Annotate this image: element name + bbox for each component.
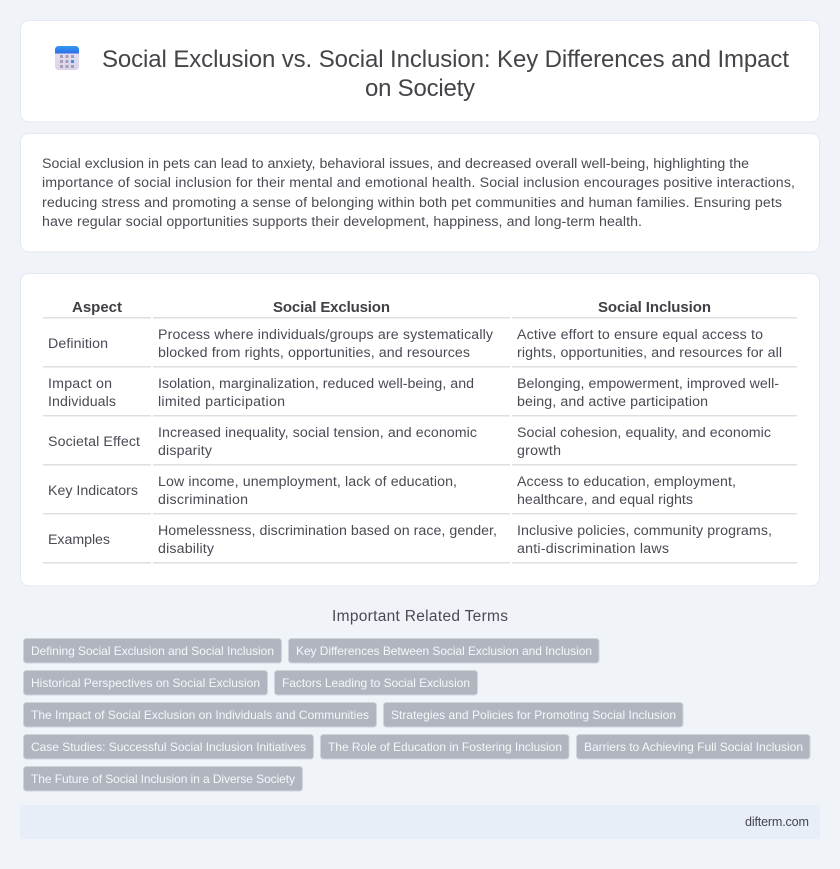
panel: header xyxy=(20,20,820,122)
row: definition: Active effort to ensure equal access to xyxy=(517,327,763,343)
heading: important related terms: Important Related Terms xyxy=(332,608,508,625)
tag xyxy=(24,734,314,759)
row: definition: blocked from rights, opportunities, and resources xyxy=(158,345,470,361)
intro paragraph: Social exclusion in pets can lead to anxiety, behavioral issues, and decreased overall well-being, highlighting the xyxy=(42,156,749,172)
row: impact on individuals: being, and active participation xyxy=(517,394,708,410)
table header: Aspect xyxy=(72,299,122,316)
row: key indicators: Low income, unemployment, lack of education, xyxy=(158,474,457,490)
row: societal effect: Social cohesion, equality, and economic xyxy=(517,425,771,441)
row: societal effect: disparity xyxy=(158,443,213,459)
tag: Defining Social Exclusion and Social Inclusion xyxy=(31,644,274,658)
row: impact on individuals: limited participation xyxy=(158,394,285,410)
row: definition: Process where individuals/groups are systematically xyxy=(158,327,494,343)
footer bar xyxy=(20,805,820,839)
row: societal effect: growth xyxy=(517,443,561,459)
row: examples: disability xyxy=(158,541,215,557)
tag: Factors Leading to Social Exclusion xyxy=(282,676,470,690)
row: societal effect: Increased inequality, social tension, and economic xyxy=(158,425,477,441)
intro paragraph xyxy=(42,156,795,230)
row: definition: rights, opportunities, and resources for all xyxy=(517,345,782,361)
icon: calendar xyxy=(55,46,79,70)
row: impact on individuals: Belonging, empowerment, improved well- xyxy=(517,376,779,392)
intro paragraph: reducing stress and promoting a sense of belonging within both pet communities and human families. Ensuring pets xyxy=(42,195,782,211)
row: key indicators: healthcare, and equal rights xyxy=(517,492,693,508)
row: examples: Homelessness, discrimination based on race, gender, xyxy=(158,523,497,539)
tag xyxy=(320,734,569,759)
tag: The Role of Education in Fostering Inclusion xyxy=(328,740,562,754)
tag: Barriers to Achieving Full Social Inclusion xyxy=(584,740,803,754)
row: examples: Inclusive policies, community programs, xyxy=(517,523,772,539)
tag: Strategies and Policies for Promoting Social Inclusion xyxy=(391,708,676,722)
tag: The Impact of Social Exclusion on Individuals and Communities xyxy=(31,708,369,722)
tag xyxy=(274,670,478,695)
tag xyxy=(288,638,599,663)
row: societal effect: Societal Effect xyxy=(48,434,140,450)
row: examples xyxy=(48,523,772,557)
title: Social Exclusion vs. Social Inclusion: Key Differences and Impact xyxy=(102,46,789,73)
row: key indicators: Key Indicators xyxy=(48,483,138,499)
table header: Social Inclusion xyxy=(598,299,711,316)
footer site name: difterm.com xyxy=(745,815,809,829)
row: key indicators: Access to education, employment, xyxy=(517,474,736,490)
title: on Society xyxy=(365,75,475,102)
row: definition: Definition xyxy=(48,336,108,352)
intro paragraph: importance of social inclusion for their mental and emotional health. Social inclusion encourages positive interactions, xyxy=(42,175,795,191)
tag xyxy=(24,638,282,663)
tag: The Future of Social Inclusion in a Diverse Society xyxy=(31,772,295,786)
row: key indicators: discrimination xyxy=(158,492,248,508)
row: examples: anti-discrimination laws xyxy=(517,541,669,557)
intro paragraph: have regular social opportunities supports their development, happiness, and long-term health. xyxy=(42,214,642,230)
row: societal effect xyxy=(48,425,771,459)
title xyxy=(102,46,789,102)
row: definition xyxy=(48,327,782,361)
tag xyxy=(24,670,268,695)
row: key indicators xyxy=(48,474,736,508)
row: impact on individuals xyxy=(48,376,779,410)
tag: Historical Perspectives on Social Exclusion xyxy=(31,676,260,690)
tag: Case Studies: Successful Social Inclusion Initiatives xyxy=(31,740,306,754)
table header: Social Exclusion xyxy=(273,299,390,316)
tag xyxy=(24,702,376,727)
tag: Key Differences Between Social Exclusion and Inclusion xyxy=(296,644,592,658)
panel: introduction xyxy=(20,134,820,252)
panel: comparison table xyxy=(20,274,820,586)
table header xyxy=(72,299,711,316)
row: impact on individuals: Individuals xyxy=(48,394,116,410)
row: impact on individuals: Impact on xyxy=(48,376,112,392)
row: examples: Examples xyxy=(48,532,110,548)
related term tags xyxy=(24,638,810,791)
tag xyxy=(384,702,683,727)
tag xyxy=(24,766,302,791)
row: impact on individuals: Isolation, marginalization, reduced well-being, and xyxy=(158,376,474,392)
tag xyxy=(576,734,810,759)
